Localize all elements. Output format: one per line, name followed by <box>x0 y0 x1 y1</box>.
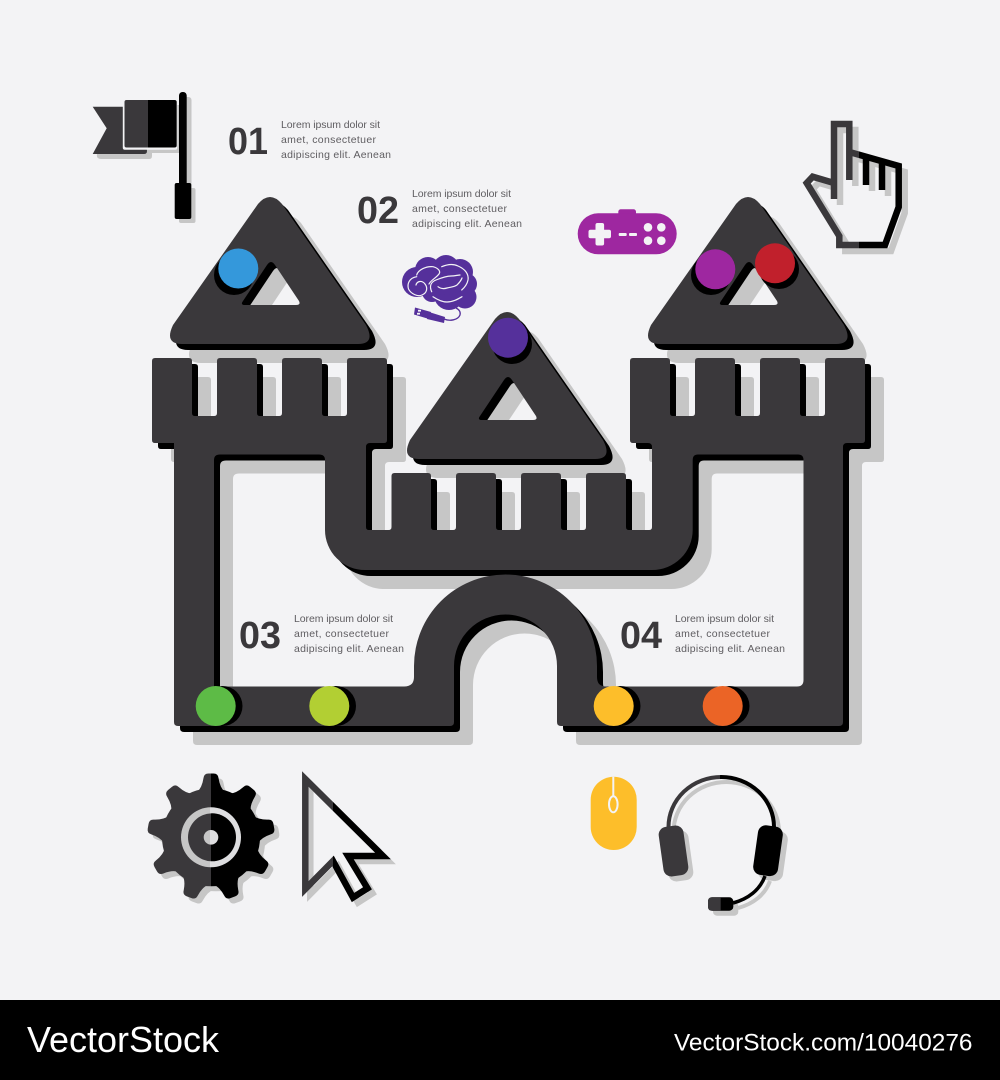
icon: flag <box>93 92 196 223</box>
text block 01: 01 <box>228 121 268 163</box>
icon: headset <box>658 777 789 916</box>
text block 01: amet, consectetuer <box>281 134 376 146</box>
text block 04: adipiscing elit. Aenean <box>675 643 785 655</box>
text block 01 <box>228 119 391 163</box>
icon: pointing hand cursor <box>807 124 905 251</box>
text block 03: 03 <box>239 615 281 657</box>
text block 03 <box>239 613 404 657</box>
footer bar: VectorStock <box>27 1019 220 1060</box>
text block 03: amet, consectetuer <box>294 628 390 640</box>
marker: green dot <box>196 686 242 726</box>
marker: magenta dot <box>691 249 735 295</box>
icon: computer mouse <box>591 777 637 850</box>
text block 02: adipiscing elit. Aenean <box>412 218 522 230</box>
marker: yellow dot <box>594 686 640 726</box>
marker: indigo dot <box>488 318 532 364</box>
text block 04: amet, consectetuer <box>675 628 770 640</box>
icon: gear <box>146 774 281 907</box>
marker: red dot <box>755 243 799 289</box>
text block 03: adipiscing elit. Aenean <box>294 643 404 655</box>
footer bar <box>0 1000 1000 1080</box>
text block 04: 04 <box>620 615 662 657</box>
text block 02: 02 <box>357 190 399 232</box>
footer bar: VectorStock.com/10040276 <box>674 1030 972 1056</box>
text block 02: Lorem ipsum dolor sit <box>412 188 511 200</box>
text block 02: amet, consectetuer <box>412 203 508 215</box>
marker: blue dot <box>214 248 258 295</box>
icon: brain with usb plug <box>402 255 477 323</box>
text block 04: Lorem ipsum dolor sit <box>675 613 774 625</box>
text block 01: adipiscing elit. Aenean <box>281 149 391 161</box>
castle shape with shadows <box>152 197 884 745</box>
marker: orange dot <box>703 686 750 726</box>
text block 03: Lorem ipsum dolor sit <box>294 613 393 625</box>
text block 01: Lorem ipsum dolor sit <box>281 119 380 131</box>
icon: gamepad <box>578 209 677 254</box>
text block 02 <box>357 188 522 232</box>
marker: lime dot <box>309 686 356 726</box>
text block 04 <box>620 613 785 657</box>
icon: arrow cursor <box>305 779 388 902</box>
